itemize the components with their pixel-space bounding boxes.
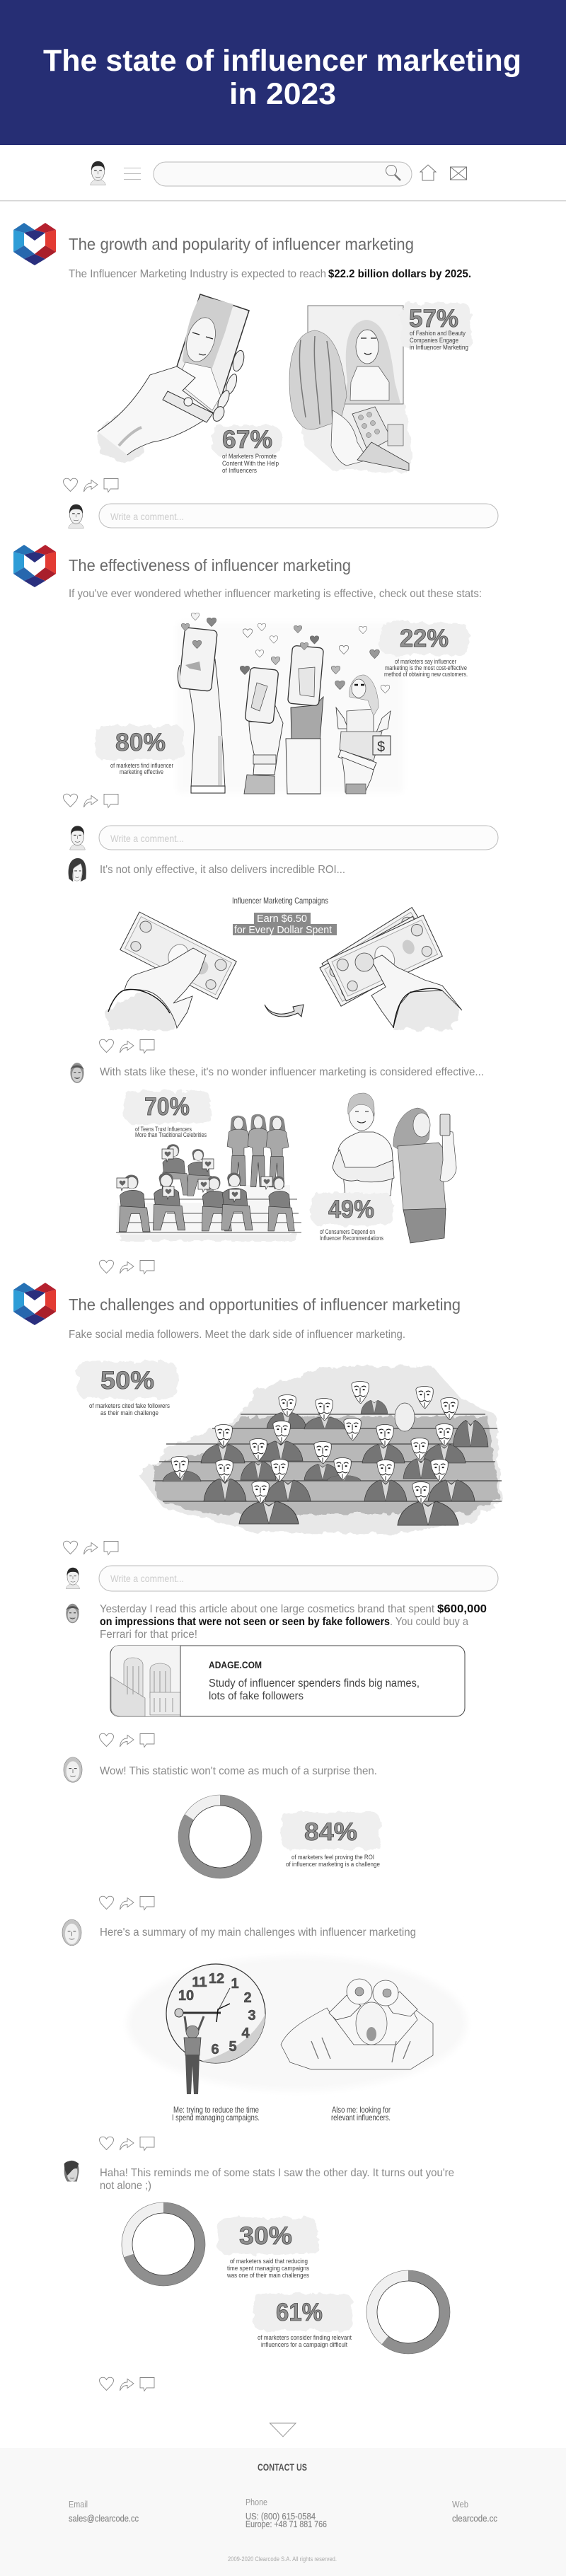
stat: 57%: 57% [409,305,458,333]
footer heading: CONTACT US [258,2462,307,2473]
stat: 67% [212,426,282,475]
arm two [244,667,283,794]
banner: earn $6.50 [233,913,337,936]
chart: 30% donut [122,2202,205,2286]
chart: 84% donut [178,1795,262,1878]
stat: 84%: 84% [304,1818,357,1846]
card title [209,1677,420,1702]
stat: 30%: 30% [239,2222,292,2250]
action icons [64,794,118,808]
title: The state of influencer marketing [43,44,521,78]
phone [246,2497,327,2529]
comment row [70,826,498,850]
stat: 30%: was one of their main challenges [226,2272,309,2280]
arrow: down triangle [270,2423,296,2437]
stat: 84%: of influencer marketing is a challenge [286,1861,380,1869]
illustration: clock and binoculars [127,1956,467,2122]
action icons [99,1896,154,1910]
stat: 50%: 50% [100,1367,154,1394]
clock: 3 [248,2008,256,2023]
stat: 30%: of marketers said that reducing [230,2258,308,2265]
reply text [100,2167,454,2192]
logo [13,223,56,265]
captions: I spend managing campaigns. [172,2113,260,2122]
card image: buildings [111,1646,180,1716]
captions: Also me: looking for [332,2105,391,2115]
heading: The growth and popularity of influencer marketing [69,235,414,253]
intro text: Fake social media followers. Meet the dark side of influencer marketing. [69,1329,405,1341]
avatar: profile [91,161,105,185]
illustration: teens on steps [116,1114,301,1241]
intro text: $22.2 billion dollars by 2025. [328,268,471,280]
stat: 84% [282,1813,381,1869]
reply: ROI [69,858,345,882]
reply text: not alone ;) [100,2180,151,2192]
right hand with bills [320,908,462,1030]
web: clearcode.cc [452,2513,497,2524]
action icons [99,2137,154,2151]
reply text: Yesterday I read this article about one large cosmetics brand that spent [100,1603,435,1615]
reply text: It's not only effective, it also delivers incredible ROI... [100,864,345,876]
stat: 80% [96,726,184,776]
stat: 67%: of Influencers [222,467,257,475]
avatar [69,858,86,882]
clock: 6 [211,2042,219,2057]
stat: 49% [311,1193,393,1242]
stat: 49%: of Consumers Depend on [320,1228,375,1236]
search field [154,162,412,186]
stat: 57%: Companies Engage [410,337,458,345]
icon: menu [124,168,141,180]
link card [110,1646,465,1716]
reply text [100,1603,487,1641]
reply text: on impressions that were not seen or seen by fake followers [100,1616,390,1628]
placeholder: Write a comment... [110,1573,184,1584]
clock: 5 [229,2039,237,2055]
arrow [265,1005,304,1017]
avatar [66,1604,79,1623]
illustration: couple with phone [333,1093,456,1243]
web: Web [452,2499,468,2509]
captions: Me: trying to reduce the time [173,2105,259,2115]
stat: 50% [78,1362,177,1417]
action icons [99,1039,154,1053]
email [69,2499,139,2524]
reply: ROI challenge [64,1757,377,1782]
intro text: If you've ever wondered whether influencer marketing is effective, check out these stats: [69,588,482,600]
heading: The challenges and opportunities of influencer marketing [69,1295,461,1314]
stat: 22%: marketing is the most cost-effective [385,664,467,672]
action icons [99,1733,154,1748]
clock: 11 [192,1975,207,1990]
stat: 80%: of marketers find influencer [110,762,173,770]
intro text: The Influencer Marketing Industry is expected to reach [69,268,326,280]
stat: 67%: 67% [222,426,272,454]
copyright: 2009-2020 Clearcode S.A. All rights reserved. [228,2555,337,2563]
stat: 22%: of marketers say influencer [395,658,456,666]
navigation bar [0,161,566,201]
panel: effectiveness [13,545,498,1273]
stat: 67%: Content With the Help [222,460,279,468]
illustration: hand holding phone [98,294,249,463]
left hand with bill [105,912,236,1030]
clock: 10 [178,1988,194,2004]
card title: lots of fake followers [209,1690,304,1702]
clock: 12 [209,1971,224,1987]
comment row [66,1566,498,1591]
stat: 70% [125,1091,211,1139]
heading: The effectiveness of influencer marketing [69,556,351,574]
comment field [99,504,498,528]
stat: 30% [218,2217,317,2280]
icon: home [420,165,436,180]
email: sales@clearcode.cc [69,2513,139,2524]
avatar [69,504,83,529]
stat: 57%: in Influencer Marketing [410,344,468,352]
clock: 1 [231,1976,239,1992]
stat: 70%: More than Traditional Celebrities [135,1131,207,1139]
arm three [286,645,323,794]
stat: 50%: as their main challenge [100,1409,158,1417]
stat: 61%: 61% [276,2299,323,2326]
captions [172,2105,391,2122]
reply: stats [70,1063,484,1083]
icon: mail [450,167,467,180]
intro text [69,268,471,280]
stat: 67%: of Marketers Promote [222,453,277,461]
banner: earn $6.50: for Every Dollar Spent [234,925,332,936]
placeholder: Write a comment... [110,511,184,522]
caption: Influencer Marketing Campaigns [232,896,328,906]
stat: 49%: Influencer Recommendations [320,1235,383,1242]
footer: contact [0,2448,566,2576]
banner: earn $6.50: Earn $6.50 [257,913,307,925]
captions: relevant influencers. [331,2113,391,2122]
action icons [99,1260,154,1273]
comment field [99,1566,498,1591]
stat: 22% [381,623,468,678]
illustration: hands with phones [177,613,403,794]
reply text: Wow! This statistic won't come as much of a surprise then. [100,1765,377,1777]
phone: US: (800) 615-0584 [246,2511,316,2522]
arm one [178,628,225,793]
woman with bag [336,675,391,794]
hanging man [184,2016,204,2094]
avatar [70,826,85,850]
stat: 84%: of marketers feel proving the ROI [291,1854,374,1861]
title: in 2023 [229,77,336,111]
reply: not alone [64,2161,454,2192]
reply text: Haha! This reminds me of some stats I saw the other day. It turns out you're [100,2167,454,2179]
reply text: $600,000 [437,1603,487,1615]
reply text: Here's a summary of my main challenges with influencer marketing [100,1927,416,1939]
action icons [99,2377,154,2391]
stat: 61%: of marketers consider finding relevant [258,2334,352,2342]
stat: 22%: method of obtaining new customers. [384,671,468,678]
title [43,44,521,111]
reply text: . You could buy a [390,1616,468,1628]
avatar [62,1919,81,1946]
panel: challenges and opportunities [13,1283,502,2391]
email: Email [69,2499,88,2509]
avatar [64,2161,79,2182]
reply: main challenges [62,1919,416,1946]
avatar [64,1757,82,1782]
phone: Europe: +48 71 881 766 [246,2519,327,2529]
stat: 50%: of marketers cited fake followers [89,1402,170,1410]
logo [13,1283,56,1325]
stat: 61%: influencers for a campaign difficult [261,2341,347,2349]
comment field [99,826,498,850]
card source: ADAGE.COM [209,1659,262,1670]
phone: Phone [246,2497,267,2507]
stat: 80%: marketing effective [120,768,163,776]
chart: 61% donut [366,2270,450,2354]
action icons [64,1541,118,1555]
card title: Study of influencer spenders finds big names, [209,1677,420,1690]
illustration: masked crowd [139,1365,502,1534]
reply text: With stats like these, it's no wonder influencer marketing is considered effective... [100,1066,484,1078]
hearts [181,613,390,693]
clock: 4 [241,2026,250,2041]
clock [166,1964,265,2063]
stat: 70%: of Teens Trust Influencers [135,1126,192,1133]
clock: 2 [243,1990,252,2006]
panel: growth and popularity [13,223,498,529]
woman with bag: $ [377,739,385,755]
stat: 80%: 80% [115,729,166,756]
avatar [70,1063,84,1083]
stat: 30%: time spent managing campaigns [227,2265,309,2272]
logo [13,545,56,587]
stat: 49%: 49% [328,1196,374,1223]
reply text: Ferrari for that price! [100,1629,197,1641]
stat: 70%: 70% [144,1093,190,1121]
comment row [69,504,498,529]
stat: 57% [400,303,471,352]
reply: fake followers [66,1603,487,1641]
illustration: woman at mirror [289,306,412,473]
header banner [0,0,566,145]
icon: magnifier [386,166,400,180]
avatar [66,1568,80,1589]
illustration: money exchange [105,896,462,1030]
placeholder: Write a comment... [110,833,184,844]
man with binoculars [281,1979,433,2069]
stat: 22%: 22% [400,625,449,652]
stat: 61% [253,2294,352,2349]
action icons [64,478,118,492]
stat: 57%: of Fashion and Beauty [410,330,466,337]
web [452,2499,497,2524]
